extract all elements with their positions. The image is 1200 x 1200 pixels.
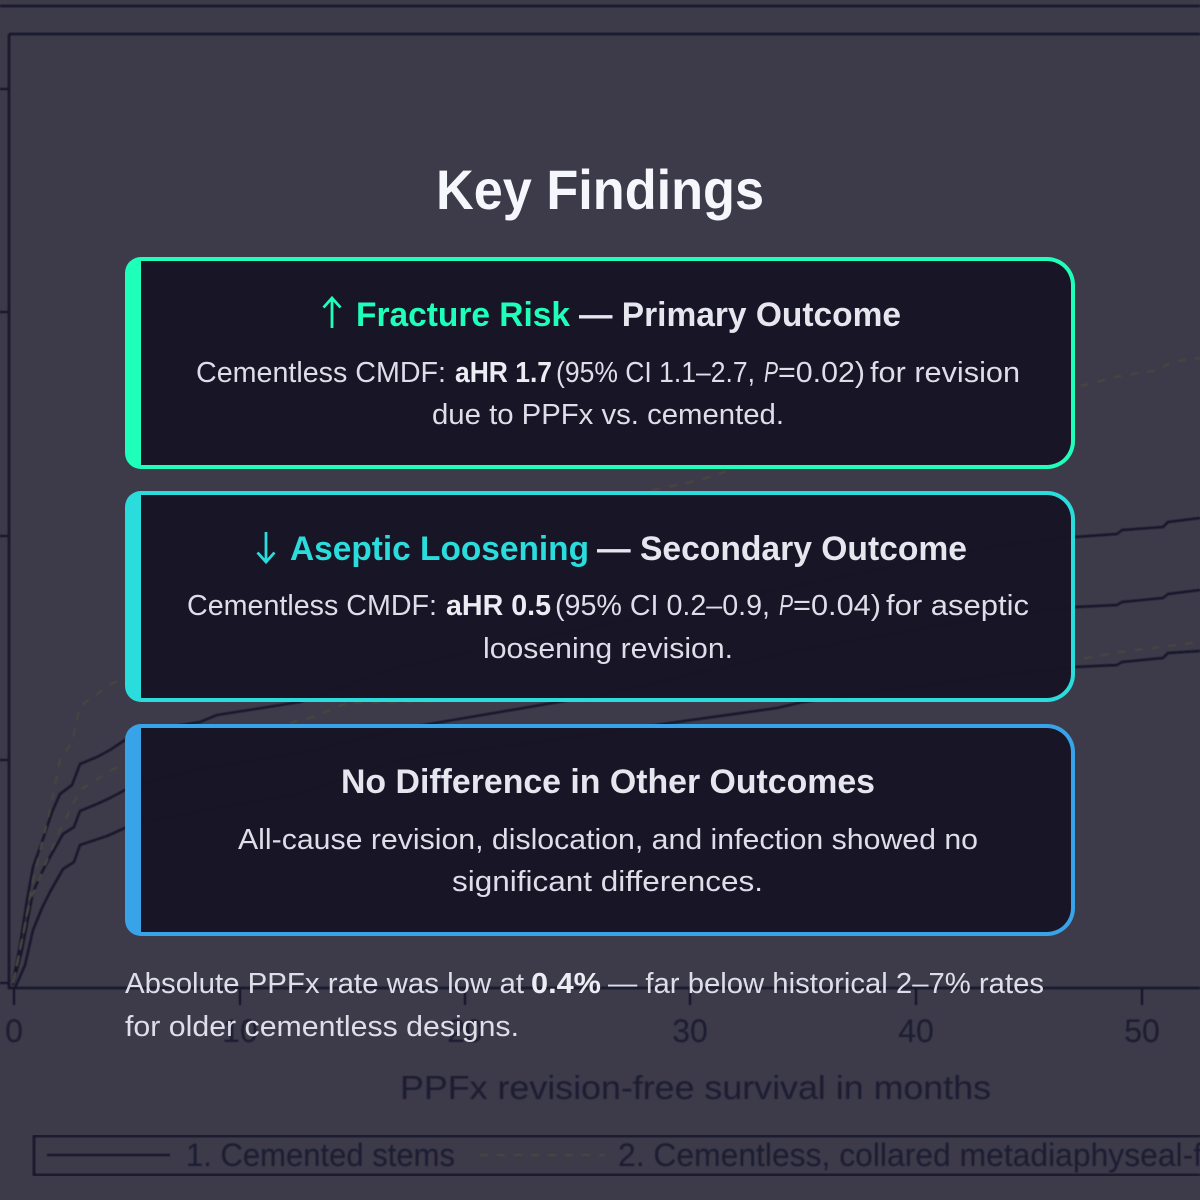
heading: aseptic loosening: Aseptic Loosening [290,530,589,568]
panel: aseptic loosening [125,491,1075,702]
background chart: legend: 1. Cemented stems [186,1137,455,1173]
footer note: Absolute PPFx rate was low at [125,968,524,1000]
footer note: for older cementless designs. [125,1011,519,1043]
body text: no difference: significant differences. [452,866,763,898]
background chart: axis title: PPFx revision-free survival in months [400,1069,991,1106]
body text: aseptic loosening: P [779,590,793,622]
body text: aseptic loosening: Cementless CMDF: [187,590,437,622]
body text: fracture risk [196,357,1020,431]
body text: fracture risk: =0.02) [778,357,865,389]
body text: fracture risk: due to PPFx vs. cemented. [432,399,784,431]
background chart: axis numbers: 50 [1124,1013,1160,1049]
heading: secondary outcome: — Secondary Outcome [597,530,967,568]
heading: fracture risk: Fracture Risk [356,296,570,334]
body text: aseptic loosening: aHR 0.5 [446,590,551,622]
body text: aseptic loosening: for aseptic [886,590,1029,622]
body text: fracture risk: for revision [870,357,1020,389]
body text: aseptic loosening [187,590,1029,665]
body text: aseptic loosening: =0.04) [793,590,881,622]
background chart: axis numbers: 40 [898,1013,934,1049]
body text: fracture risk: Cementless CMDF: [196,357,446,389]
heading: no difference: No Difference in Other Outcomes [341,763,875,801]
heading: primary outcome: — Primary Outcome [579,296,901,334]
body text: aseptic loosening: loosening revision. [483,633,733,665]
footer note: 0.4% [531,968,601,1000]
title: Key Findings [436,158,764,221]
background chart: axis numbers: 30 [672,1013,708,1049]
body text: no difference: All-cause revision, dislocation, and infection showed no [238,824,978,856]
background chart: axis numbers [5,1013,1160,1049]
body text: fracture risk: aHR 1.7 [455,357,552,389]
footer note: — far below historical 2–7% rates [608,968,1044,1000]
body text: aseptic loosening: (95% CI 0.2–0.9, [555,590,770,622]
background chart: legend [34,1136,1200,1175]
background chart: axis numbers: 20 [447,1013,483,1049]
body text: fracture risk: (95% CI 1.1–2.7, [556,357,755,389]
icon: down arrow [258,532,274,562]
footer note [125,968,1044,1043]
background chart: axis numbers: 10 [222,1013,258,1049]
icon: up arrow [324,298,340,328]
panel: no difference [125,724,1075,936]
body text: fracture risk: P [764,357,778,389]
body text: no difference [238,824,978,898]
background chart: axis numbers: 0 [5,1013,23,1049]
panel: fracture risk [125,257,1075,469]
